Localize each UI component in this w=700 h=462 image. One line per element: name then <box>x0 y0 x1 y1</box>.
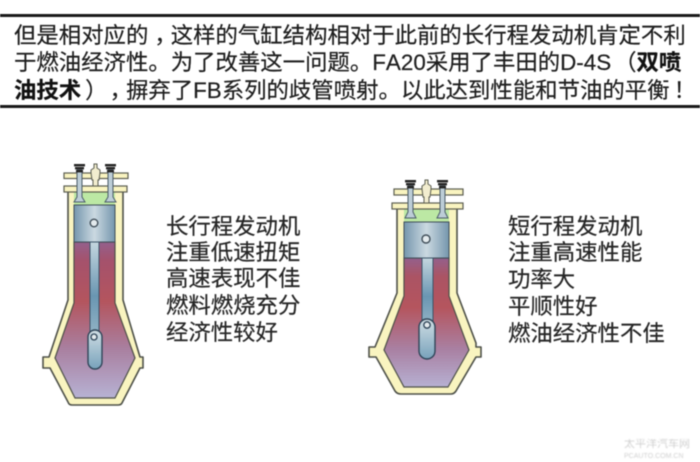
text block: short-stroke engine traits: 短行程发动机 <box>508 214 642 239</box>
valve springs <box>74 164 116 172</box>
combustion chamber <box>384 258 469 387</box>
text block: long-stroke engine traits: 经济性较好 <box>166 320 278 345</box>
valves <box>74 170 116 202</box>
combustion chamber <box>55 242 135 398</box>
watermark <box>624 438 690 459</box>
crank pin <box>91 334 97 340</box>
crank pin <box>424 322 430 328</box>
connecting rod <box>90 242 99 332</box>
spark plug <box>91 164 100 186</box>
diagram: long-stroke engine <box>43 164 143 405</box>
text block: short-stroke engine traits: 功率大 <box>508 267 575 292</box>
valves <box>405 186 448 218</box>
text block: long-stroke engine traits: 注重低速扭矩 <box>166 240 300 265</box>
text block: long-stroke engine traits: 长行程发动机 <box>166 214 300 239</box>
text block: short-stroke engine traits <box>508 214 665 346</box>
panel: intro text box <box>0 14 700 108</box>
engine block casing <box>369 207 481 394</box>
text line 3: 油技术），摒弃了FB系列的歧管喷射。以此达到性能和节油的平衡！ <box>14 78 696 103</box>
piston <box>404 222 449 258</box>
text block: short-stroke engine traits: 注重高速性能 <box>508 240 642 265</box>
engine block casing <box>43 189 143 405</box>
spark plug <box>422 180 431 203</box>
text block: short-stroke engine traits: 平顺性好 <box>508 294 598 319</box>
text line 1: 但是相对应的 ，这样的气缸结构相对于此前的长行程发动机肯定不利 <box>14 23 686 48</box>
cylinder head bars <box>392 189 463 209</box>
green chamber <box>404 209 449 222</box>
text block: long-stroke engine traits <box>166 214 301 345</box>
text line 2: 于燃油经济性。为了改善这一问题。FA20采用了丰田的D-4S（双喷 <box>14 50 681 75</box>
connecting rod <box>422 258 433 322</box>
rod big end <box>88 330 102 369</box>
text block: long-stroke engine traits: 高速表现不佳 <box>166 266 300 291</box>
green chamber <box>74 192 115 205</box>
rod big end <box>419 319 435 359</box>
valve springs <box>405 180 448 188</box>
cylinder head bars <box>64 173 128 192</box>
diagram: short-stroke engine <box>369 180 481 394</box>
piston pin <box>90 219 98 227</box>
piston <box>74 205 115 242</box>
text block: short-stroke engine traits: 燃油经济性不佳 <box>508 321 665 346</box>
piston pin <box>422 235 430 243</box>
text block: long-stroke engine traits: 燃料燃烧充分 <box>166 293 300 318</box>
